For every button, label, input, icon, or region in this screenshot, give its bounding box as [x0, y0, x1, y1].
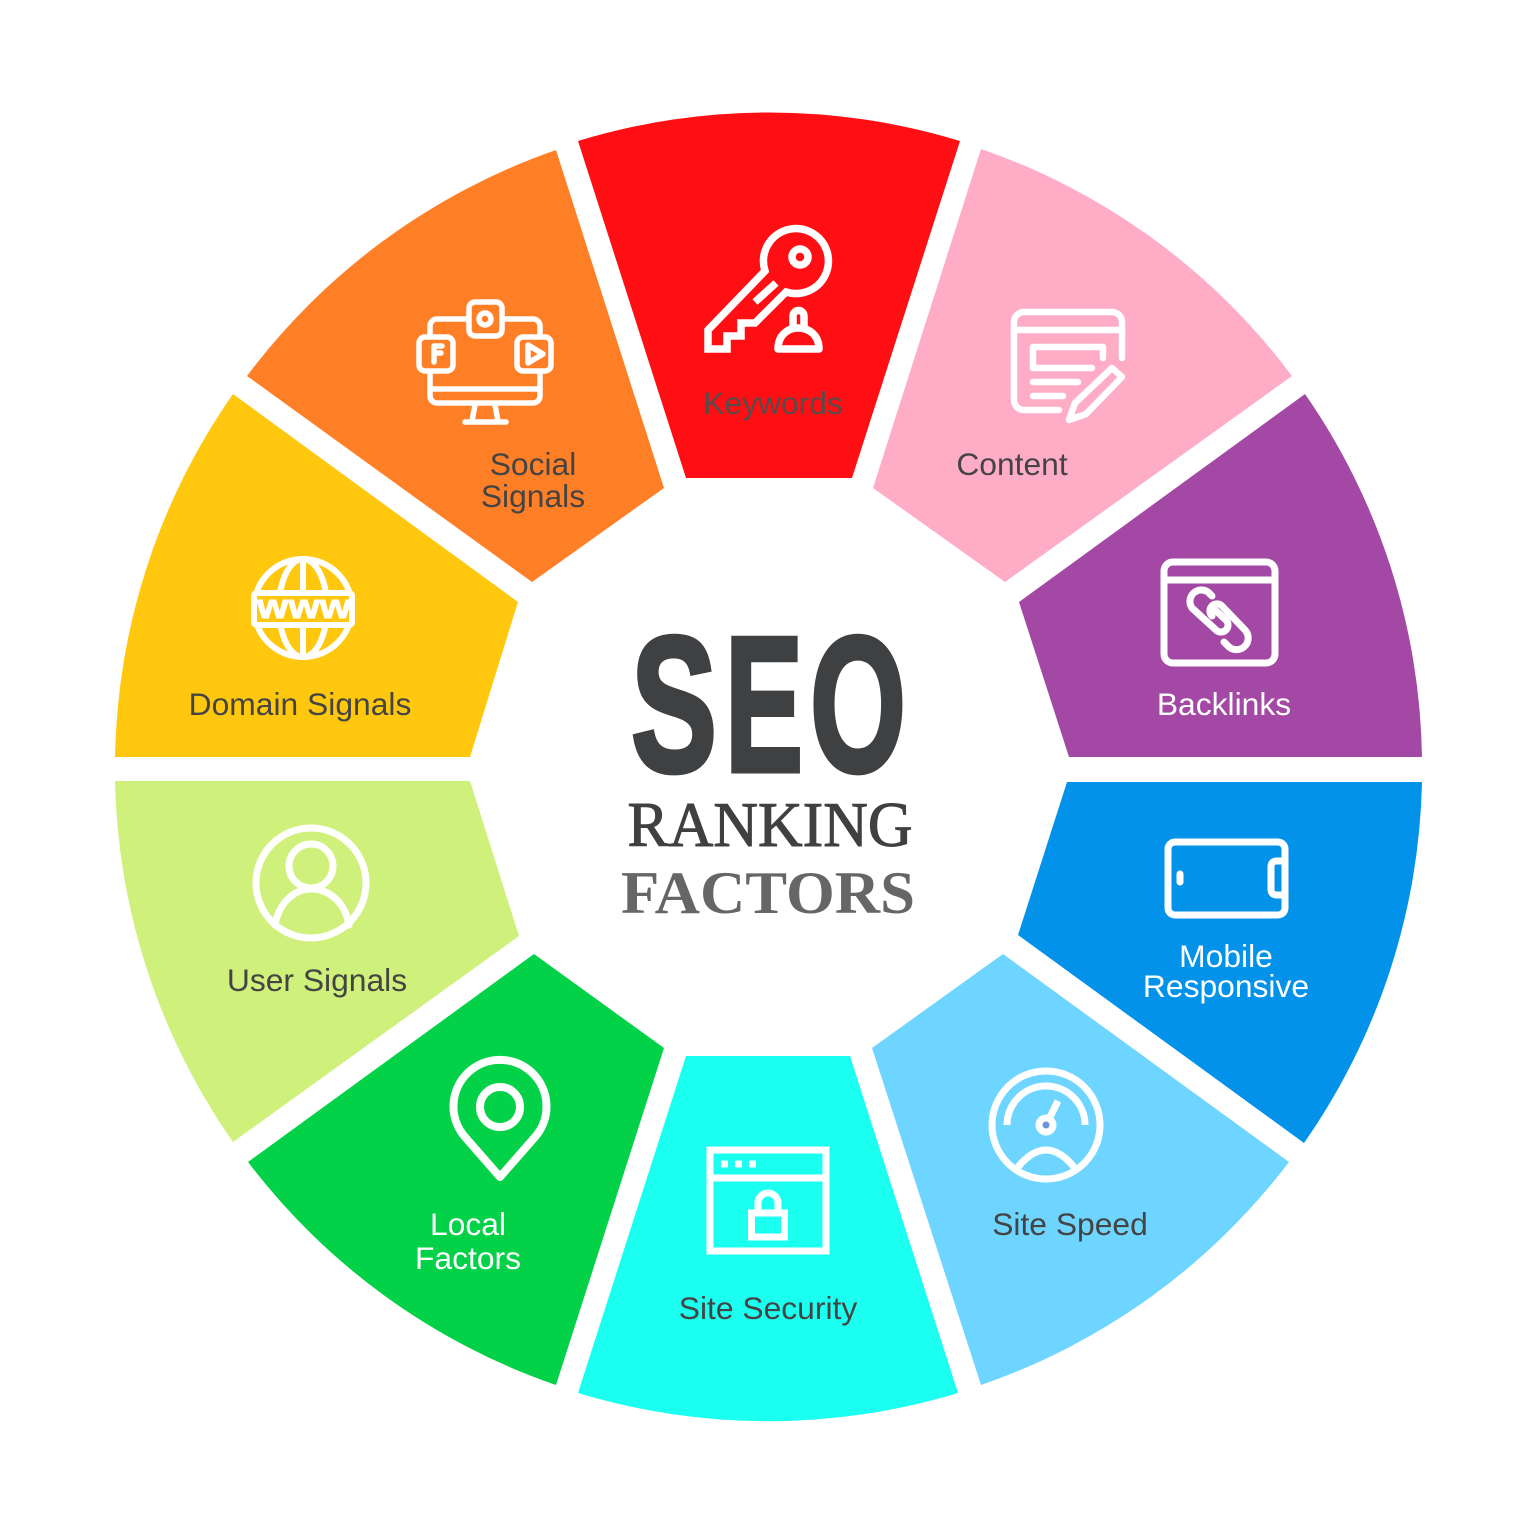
label: user signals: User Signals [227, 962, 407, 998]
label: social signals [481, 446, 585, 514]
label: social signals: Social [490, 446, 576, 482]
panel: content [873, 149, 1292, 582]
heading: SEO: E [725, 596, 803, 812]
subheading: factors: FACTORS [621, 860, 915, 926]
icon: tablet [1168, 842, 1285, 915]
panel: keywords [578, 112, 960, 478]
label: local factors [415, 1206, 521, 1276]
label: mobile responsive: Mobile [1179, 938, 1273, 974]
panel: backlinks [1019, 394, 1422, 757]
panel: local factors [248, 954, 664, 1385]
label: keywords: Keywords [703, 385, 843, 421]
subheading: ranking: RANKING [628, 789, 912, 860]
label: site speed: Site Speed [992, 1206, 1148, 1242]
label: local factors: Local [430, 1206, 506, 1242]
panel: site security [578, 1056, 958, 1421]
heading: SEO: S [631, 596, 717, 812]
heading: SEO: O [810, 596, 906, 812]
icon: user avatar [256, 828, 366, 938]
panel: site speed [872, 954, 1289, 1385]
icon: monitor with social apps [419, 302, 551, 422]
icon: location pin [453, 1060, 546, 1177]
label: mobile responsive [1143, 938, 1309, 1004]
icon: key and person [708, 229, 828, 349]
label: content: Content [956, 446, 1068, 482]
heading: SEO [631, 596, 906, 812]
panel: user signals [115, 781, 519, 1142]
icon: browser with padlock [710, 1150, 826, 1251]
icon: browser with chain link [1164, 562, 1275, 663]
label: backlinks: Backlinks [1157, 686, 1291, 722]
label: local factors: Factors [415, 1240, 521, 1276]
icon: speedometer [992, 1071, 1100, 1179]
panel: domain signals [115, 394, 518, 757]
label: domain signals: Domain Signals [189, 686, 411, 722]
panel: mobile responsive [1018, 782, 1422, 1143]
panel: social signals [247, 150, 664, 582]
label: social signals: Signals [481, 478, 585, 514]
icon: document and pencil [1014, 312, 1122, 420]
title: SEO ranking factors [621, 596, 915, 926]
icon: www globe [254, 559, 352, 657]
label: mobile responsive: Responsive [1143, 968, 1309, 1004]
label: site security: Site Security [679, 1290, 857, 1326]
icon: www globe: www [256, 588, 352, 626]
